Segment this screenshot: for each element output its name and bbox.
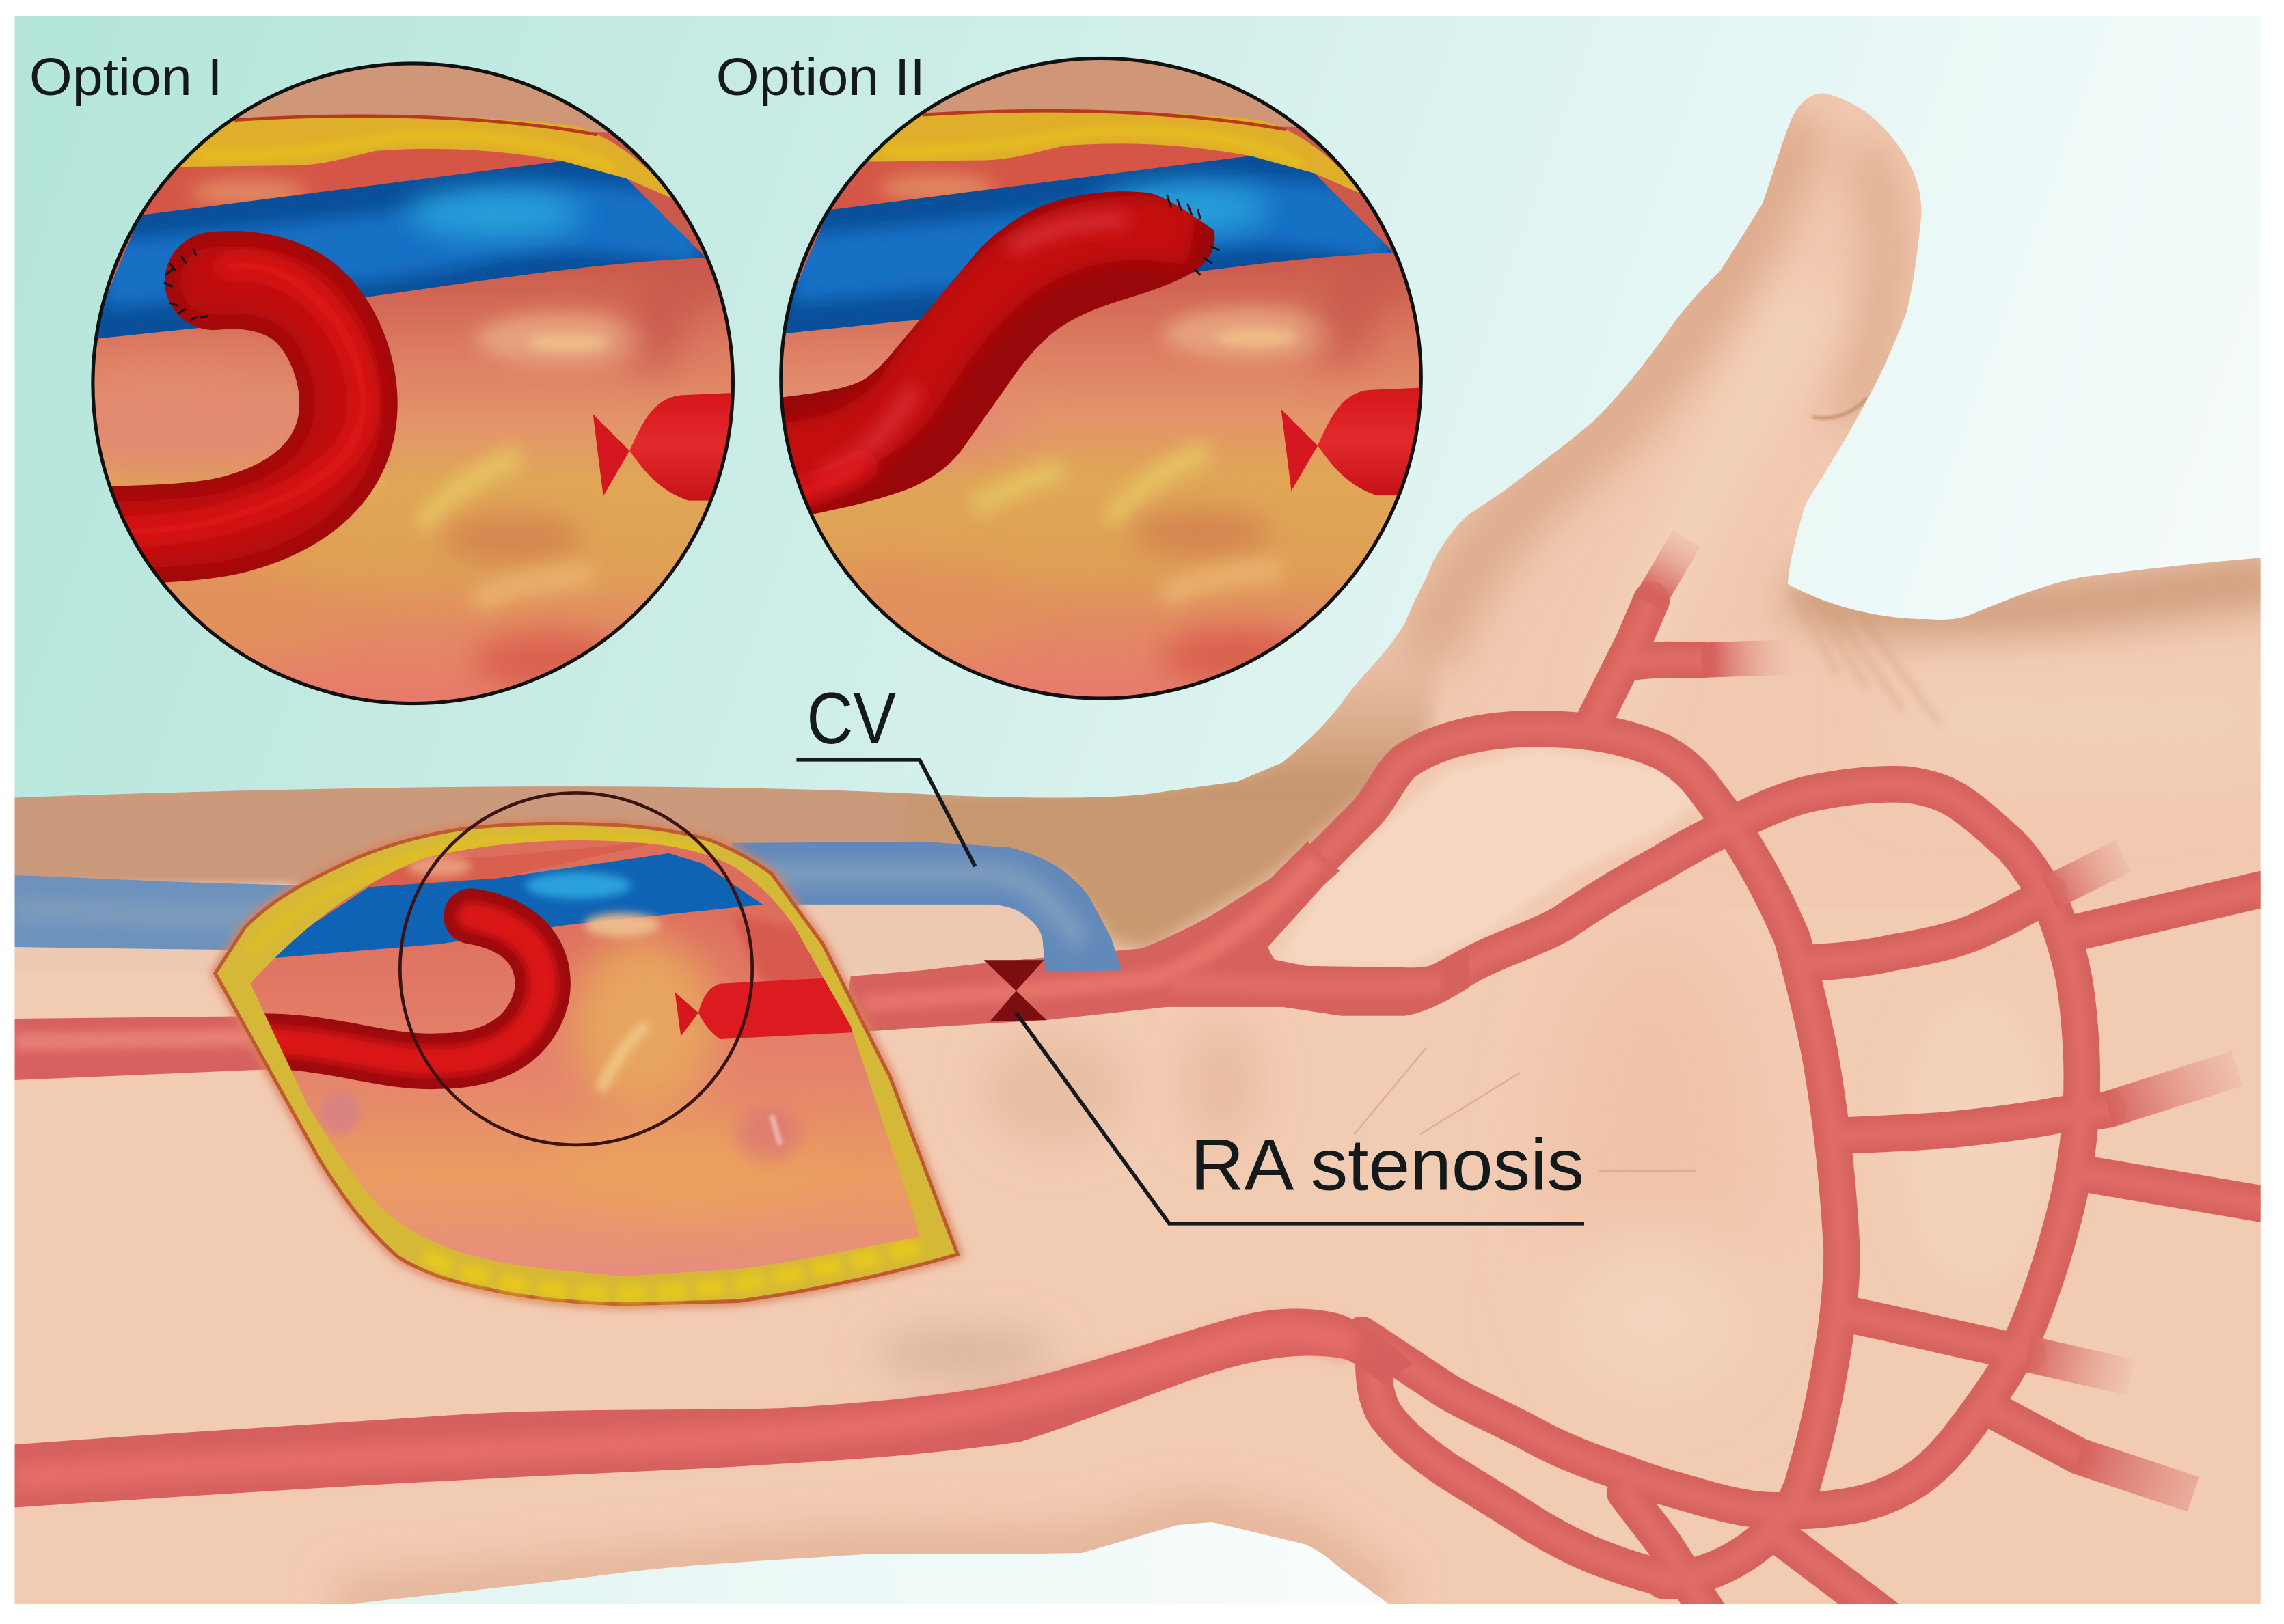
fading arterial branches [1648, 538, 2237, 1494]
inset: option I [14, 59, 747, 717]
wrist shadow [908, 629, 1442, 951]
option II sutures [1167, 195, 1220, 275]
cephalic vein, forearm [14, 842, 1121, 972]
option I sutures [164, 249, 208, 320]
magnifier circle [400, 793, 752, 1145]
patch rim [215, 823, 957, 1304]
option II graft [761, 191, 1214, 527]
label: Option II: Option II [716, 48, 925, 107]
ulnar artery trunk [14, 1308, 1413, 1507]
radial artery, forearm and junction [14, 842, 1469, 1080]
label: RA stenosis: RA stenosis [1191, 1124, 1584, 1206]
teal background [15, 16, 2261, 798]
surgical incision patch [215, 820, 957, 1304]
leader: RA stenosis [1016, 1013, 1584, 1224]
inset: option II [703, 53, 1435, 712]
label: CV: CV [806, 677, 896, 759]
hand arteries [14, 538, 2284, 1624]
option I graft [44, 265, 363, 536]
patch glow [215, 823, 957, 1304]
patch graft [242, 916, 543, 1061]
patch interior [219, 820, 952, 1288]
leader: CV [796, 760, 975, 866]
label: Option I: Option I [29, 48, 223, 107]
stenosis marker [984, 960, 1047, 1021]
pale hand loop [1277, 747, 1706, 967]
exposed vein [267, 853, 763, 959]
patch distal stump [675, 992, 698, 1036]
